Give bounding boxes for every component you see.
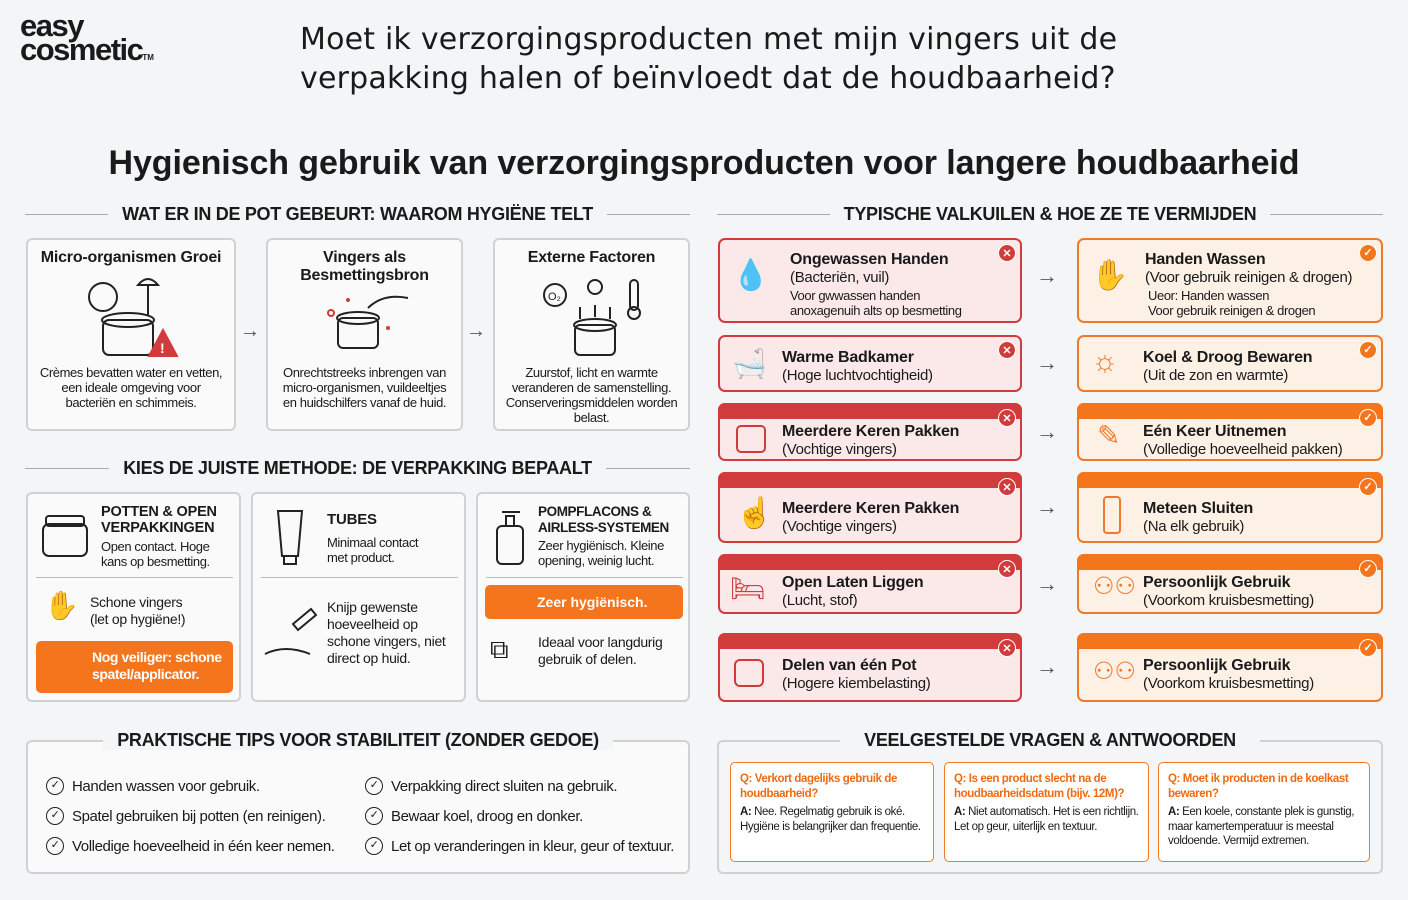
panel: extern: Externe Factoren (528, 249, 655, 266)
panel: micro: Crèmes bevatten water en vetten, een ideale omgeving voor bacteriën en schimmeis. (40, 365, 222, 410)
panel: FAQ: VEELGESTELDE VRAGEN & ANTWOORDEN (864, 730, 1236, 750)
faq 3: A: Een koele, constante plek is gunstig, maar kamertemperatuur is meestal voldoende. Vermijd extremen. (1168, 806, 1354, 847)
row 1 (718, 238, 1022, 323)
callout: spatel: Nog veiliger: schone spatel/applicator. (92, 649, 222, 682)
row 5: 🛏 (730, 573, 766, 604)
panel: vingers: Vingers als (323, 249, 406, 266)
panel: tubes: Minimaal contact (327, 535, 418, 550)
arrow: → (240, 320, 260, 342)
panel: potten: POTTEN & OPEN (101, 504, 217, 520)
panel: tips: Handen wassen voor gebruik. (72, 778, 260, 794)
callout: zeer hygienisch (485, 585, 683, 619)
title (300, 22, 1117, 96)
row 1: Voor gwwassen handen (790, 288, 920, 303)
icon: bottles: ⧉ (490, 634, 509, 664)
row 4: Meerdere Keren Pakken (782, 500, 959, 517)
row 1: (Bacteriën, vuil) (790, 269, 889, 286)
row 5: ✕ (1002, 564, 1012, 576)
panel: tips: Spatel gebruiken bij potten (en reinigen). (72, 808, 325, 824)
row 4: ☝ (736, 497, 773, 530)
faq 1: Q: Verkort dagelijks gebruik de houdbaarheid? (740, 773, 897, 800)
row 4 (718, 472, 1022, 543)
text: ✓ (1363, 642, 1373, 654)
text: ✋ (1091, 259, 1128, 292)
row 4: ✕ (1002, 482, 1012, 494)
panel: potten: Schone vingers (90, 594, 182, 610)
icon: o2 sun thermo (543, 279, 641, 356)
row 2: ✕ (1002, 345, 1012, 357)
icon: jar bacteria: ! (160, 340, 165, 356)
panel: vingers (266, 238, 463, 431)
text: → (1036, 494, 1058, 519)
text: ☼ (1091, 345, 1118, 378)
faq 2: Q: Is een product slecht na de houdbaarheidsdatum (bijv. 12M)? (954, 773, 1124, 800)
row 6 (718, 633, 1022, 702)
logo (20, 8, 154, 67)
row 3: ✕ (1002, 413, 1012, 425)
panel: tubes: TUBES (327, 511, 377, 528)
panel: extern: Zuurstof, licht en warmte veranderen de samenstelling. Conserveringsmiddelen worden belast. (506, 365, 677, 425)
text: → (1036, 571, 1058, 596)
text: Persoonlijk Gebruik (1143, 574, 1290, 591)
panel: tips: ✓ (370, 839, 378, 851)
icon: jar (42, 515, 88, 557)
panel: micro (26, 238, 236, 431)
text: ✓ (1363, 344, 1373, 356)
panel: tips: Verpakking direct sluiten na gebruik. (391, 778, 617, 794)
icon: o2 sun thermo: O₂ (548, 291, 561, 303)
text: (Voorkom kruisbesmetting) (1143, 592, 1314, 609)
title: verpakking halen of beïnvloedt dat de houdbaarheid? (300, 61, 1116, 96)
panel: pomp: opening, weinig lucht. (538, 553, 654, 568)
panel: tubes (251, 492, 466, 702)
text: ⚇⚇ (1093, 658, 1136, 685)
text: (Volledige hoeveelheid pakken) (1143, 441, 1342, 458)
section heading: pot: WAT ER IN DE POT GEBEURT: WAAROM HYGIËNE TELT (122, 204, 593, 224)
text: (Voor gebruik reinigen & drogen) (1145, 269, 1352, 286)
panel: tubes: Knijp gewenste (327, 599, 418, 615)
panel: tubes: schone vingers, niet (327, 633, 446, 649)
text: (Na elk gebruik) (1143, 518, 1244, 535)
panel: potten: VERPAKKINGEN (101, 520, 214, 536)
panel: tips: ✓ (51, 809, 59, 821)
logo: cosmeticTM (20, 32, 154, 67)
text: ✓ (1363, 412, 1373, 424)
panel: tips: ✓ (51, 839, 59, 851)
faq 1: A: Nee. Regelmatig gebruik is oké. Hygiëne is belangrijker dan frequentie. (740, 806, 921, 832)
row 3: (Vochtige vingers) (782, 441, 897, 458)
row 2: Warme Badkamer (782, 349, 914, 366)
row 2: 🛁 (732, 348, 767, 379)
text: → (1036, 654, 1058, 679)
panel: tips: Volledige hoeveelheid in één keer nemen. (72, 838, 335, 854)
panel: vingers: Onrechtstreeks inbrengen van micro-organismen, vuildeeltjes en huidschilfers vanaf de huid. (283, 365, 446, 410)
panel: tubes: direct op huid. (327, 650, 410, 666)
text: Persoonlijk Gebruik (1143, 657, 1290, 674)
text: ✓ (1363, 563, 1373, 575)
text: (Uit de zon en warmte) (1143, 367, 1288, 384)
row 5: Open Laten Liggen (782, 574, 924, 591)
panel: tips: PRAKTISCHE TIPS VOOR STABILITEIT (ZONDER GEDOE) (117, 730, 599, 750)
panel: potten: Open contact. Hoge (101, 539, 209, 554)
faq 3: Q: Moet ik producten in de koelkast bewaren? (1168, 773, 1348, 800)
text: (Voorkom kruisbesmetting) (1143, 675, 1314, 692)
icon: pump (496, 511, 524, 565)
panel: tips: Bewaar koel, droog en donker. (391, 808, 583, 824)
title: Moet ik verzorgingsproducten met mijn vingers uit de (300, 22, 1117, 57)
section heading: methode: KIES DE JUISTE METHODE: DE VERPAKKING BEPAALT (123, 458, 592, 478)
row 6: Delen van één Pot (782, 657, 916, 674)
panel: potten: kans op besmetting. (101, 554, 210, 569)
row 3 (718, 403, 1022, 461)
row 5 (718, 554, 1022, 614)
panel: pomp: POMPFLACONS & (538, 504, 651, 519)
panel: tips (26, 740, 690, 874)
row 2: (Hoge luchtvochtigheid) (782, 367, 933, 384)
text: ✓ (1363, 247, 1373, 259)
row 1: 💧 (732, 259, 769, 292)
text: → (1036, 419, 1058, 444)
faq 2 (944, 762, 1149, 862)
panel: tips: ✓ (370, 779, 378, 791)
row 6: ✕ (1002, 643, 1012, 655)
panel: tubes: hoeveelheid op (327, 616, 418, 632)
faq 3 (1158, 762, 1370, 862)
panel: extern (493, 238, 690, 431)
panel: pomp: gebruik of delen. (538, 651, 636, 667)
section heading: valkuilen: TYPISCHE VALKUILEN & HOE ZE TE VERMIJDEN (844, 204, 1256, 224)
faq 2: A: Niet automatisch. Het is een richtlijn. Let op geur, uiterlijk en textuur. (954, 806, 1139, 832)
icon: jar bacteria (88, 278, 179, 357)
panel: pomp (476, 492, 690, 702)
logo: easy (20, 8, 83, 43)
panel: vingers: Besmettingsbron (300, 267, 429, 284)
subtitle: Hygienisch gebruik van verzorgingsproducten voor langere houdbaarheid (109, 144, 1299, 182)
row 6: (Hogere kiembelasting) (782, 675, 930, 692)
panel: potten: (let op hygiëne!) (90, 611, 185, 627)
arrow: → (466, 320, 486, 342)
panel: micro: Micro-organismen Groei (41, 249, 221, 266)
panel: pomp: Zeer hygiënisch. Kleine (538, 538, 664, 553)
text: ✓ (1363, 481, 1373, 493)
row 3: Meerdere Keren Pakken (782, 423, 959, 440)
icon: squeeze (264, 608, 318, 655)
row 2 (718, 335, 1022, 392)
callout: zeer hygienisch: Zeer hygiënisch. (537, 594, 647, 610)
panel: FAQ (717, 740, 1383, 874)
text: → (1036, 350, 1058, 375)
text: → (1036, 263, 1058, 288)
text: Meteen Sluiten (1143, 500, 1253, 517)
panel: pomp: Ideaal voor langdurig (538, 634, 662, 650)
panel: pomp: AIRLESS-SYSTEMEN (538, 520, 669, 535)
panel: potten (26, 492, 241, 702)
panel: tips: Let op veranderingen in kleur, geur of textuur. (391, 838, 674, 854)
callout: spatel (36, 641, 233, 693)
text: Voor gebruik reinigen & drogen (1148, 303, 1315, 318)
row 1: anoxagenuih alts op besmetting (790, 303, 962, 318)
text: Koel & Droog Bewaren (1143, 349, 1312, 366)
text: ✎ (1097, 420, 1120, 451)
panel: tips: ✓ (370, 809, 378, 821)
row 1: ✕ (1002, 248, 1012, 260)
row 1: Ongewassen Handen (790, 251, 948, 268)
faq 1 (730, 762, 934, 862)
icon: finger jar (327, 296, 408, 349)
icon: tube (276, 510, 304, 565)
text: Ueor: Handen wassen (1148, 288, 1269, 303)
text: ⚇⚇ (1093, 573, 1136, 600)
row 5: (Lucht, stof) (782, 592, 857, 609)
icon: hand: ✋ (44, 590, 79, 621)
text: Handen Wassen (1145, 251, 1265, 268)
text: Eén Keer Uitnemen (1143, 423, 1286, 440)
panel: tips: ✓ (51, 779, 59, 791)
row 4: (Vochtige vingers) (782, 518, 897, 535)
panel: tubes: met product. (327, 550, 394, 565)
